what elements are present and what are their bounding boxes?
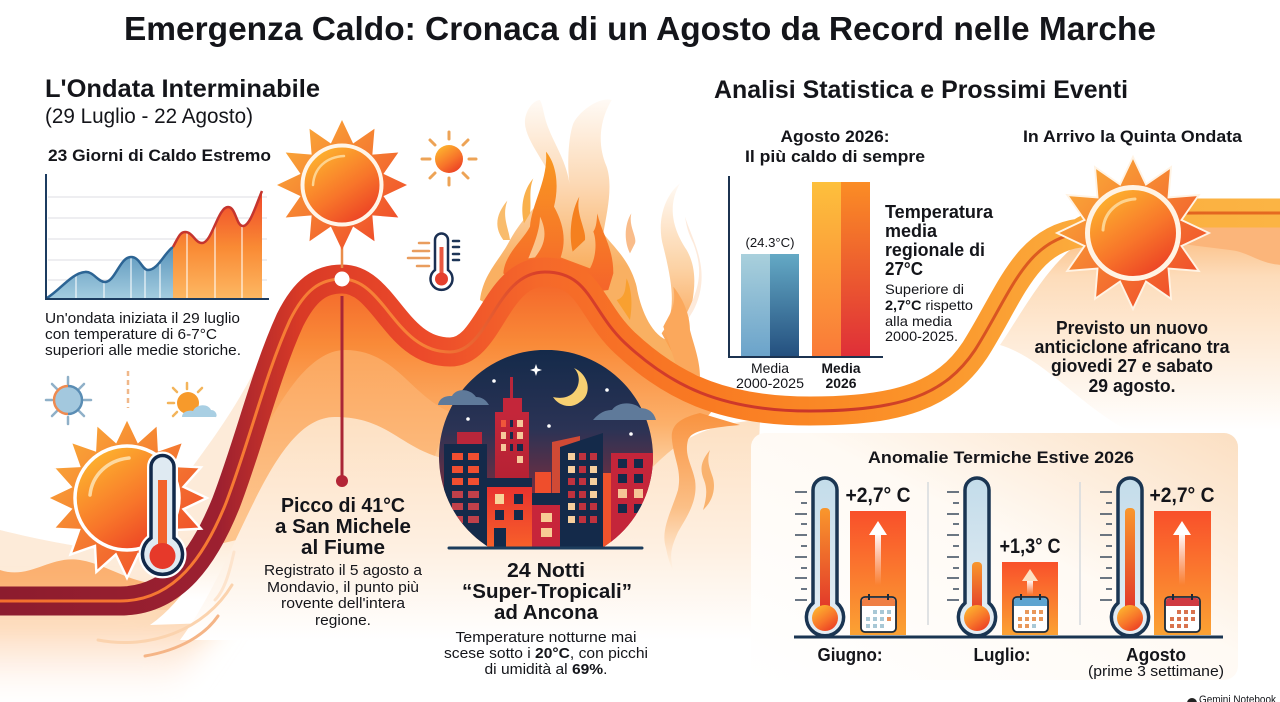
text: previsto: 29 agosto.: [1088, 376, 1176, 396]
text: temperatura media: [885, 202, 994, 344]
text: temperatura media: regionale di: [885, 240, 985, 260]
text: picco: Mondavio, il punto più: [267, 579, 419, 596]
bar chart: media: (24.3°C): [746, 235, 794, 250]
label: agosto: Agosto: [1126, 645, 1186, 665]
text: notti: [444, 560, 648, 678]
calendar: giugno: [861, 594, 896, 632]
text: temperatura media: Temperatura: [885, 202, 994, 222]
text: picco: al Fiume: [301, 537, 385, 559]
peak marker: [334, 272, 350, 487]
heat curve ribbon: [0, 213, 1280, 601]
chart heading: agosto: [745, 127, 925, 166]
line chart: 23 giorni: [46, 174, 269, 299]
text: ondata: [45, 310, 241, 359]
label: agosto: (prime 3 settimane): [1088, 663, 1224, 680]
bar chart: media: Media: [751, 360, 789, 376]
text: temperatura media: media: [885, 221, 938, 241]
icon: blue sun: [46, 377, 91, 424]
text: previsto: giovedi 27 e sabato: [1051, 356, 1213, 376]
icon: large sun with thermometer: [47, 418, 207, 578]
thermometer: agosto: [1111, 478, 1149, 636]
bar chart: media: 2000-2025: [736, 375, 804, 391]
icon: small thermometer: [408, 234, 459, 290]
section heading: l'ondata: (29 Luglio - 22 Agosto): [45, 105, 253, 128]
bar chart: media: [729, 176, 883, 391]
text: notti: scese sotto i 20°C, con picchi: [444, 645, 648, 662]
text: notti: 24 Notti: [507, 560, 585, 582]
text: temperatura media: 2000-2025.: [885, 328, 958, 344]
text: temperatura media: 2,7°C rispetto: [885, 297, 973, 313]
text: ondata: con temperature di 6-7°C: [45, 326, 217, 343]
scale ticks: [795, 492, 1112, 600]
text: notti: ad Ancona: [494, 602, 599, 624]
bar: giugno: [850, 511, 906, 635]
area under the heat curve: [150, 272, 760, 640]
text: notti: “Super-Tropicali”: [462, 581, 632, 603]
baseline: [794, 636, 1223, 638]
value: luglio: +1,3° C: [1000, 535, 1060, 558]
value: agosto: +2,7° C: [1150, 484, 1214, 507]
label: luglio: Luglio:: [974, 645, 1030, 665]
section heading: l'ondata: [45, 75, 320, 128]
text: notti: Temperature notturne mai: [456, 629, 636, 646]
title: Emergenza Caldo: Cronaca di un Agosto da Record nelle Marche: [124, 10, 1156, 47]
text: temperatura media: 27°C: [885, 259, 923, 279]
bar chart: media: Media: [822, 360, 861, 376]
text: ondata: superiori alle medie storiche.: [45, 342, 241, 359]
panel heading: Anomalie Termiche Estive 2026: [868, 448, 1134, 467]
text: picco: regione.: [315, 612, 371, 629]
chart heading: 23 Giorni di Caldo Estremo: [48, 146, 271, 165]
text: picco: Registrato il 5 agosto a: [264, 562, 423, 579]
label: agosto: [1088, 645, 1224, 680]
wave backdrop: [0, 225, 1280, 690]
dashed vertical marker: [127, 371, 129, 408]
bar: luglio: [1002, 562, 1058, 635]
icon: right sun: [1057, 157, 1209, 309]
motion lines: [98, 552, 234, 656]
text: previsto: [1034, 318, 1230, 396]
heat flames: [480, 99, 702, 377]
bar: agosto: [1154, 511, 1211, 635]
text: ondata: Un'ondata iniziata il 29 luglio: [45, 310, 240, 327]
text: picco: [264, 495, 423, 629]
text: picco: a San Michele: [275, 516, 411, 538]
text: previsto: anticiclone africano tra: [1034, 337, 1230, 357]
night city illustration: [438, 350, 656, 548]
chart heading: agosto: Agosto 2026:: [780, 127, 890, 146]
label: giugno: Giugno:: [818, 645, 882, 665]
value: giugno: +2,7° C: [846, 484, 910, 507]
chart heading: agosto: Il più caldo di sempre: [745, 147, 925, 166]
panel: anomalie termiche: [751, 433, 1238, 680]
section heading: analisi: Analisi Statistica e Prossimi Eventi: [714, 76, 1128, 104]
text: previsto: Previsto un nuovo: [1056, 318, 1208, 338]
calendar: agosto: [1165, 594, 1200, 632]
icon: small sun: [422, 132, 476, 185]
text: picco: Picco di 41°C: [281, 495, 405, 517]
heading: quinta ondata: In Arrivo la Quinta Ondata: [1023, 127, 1243, 146]
section heading: l'ondata: L'Ondata Interminabile: [45, 75, 320, 103]
text: temperatura media: alla media: [885, 313, 952, 329]
thermometer: luglio: [958, 478, 996, 636]
calendar: luglio: [1013, 594, 1048, 632]
icon: top sun: [277, 120, 407, 268]
thermometer: giugno: [806, 478, 844, 636]
text: temperatura media: Superiore di: [885, 281, 964, 297]
text: picco: rovente dell'intera: [281, 595, 406, 612]
icon: sun with cloud: [168, 383, 217, 417]
text: notti: di umidità al 69%.: [484, 661, 608, 678]
bar chart: media: 2026: [826, 375, 857, 391]
